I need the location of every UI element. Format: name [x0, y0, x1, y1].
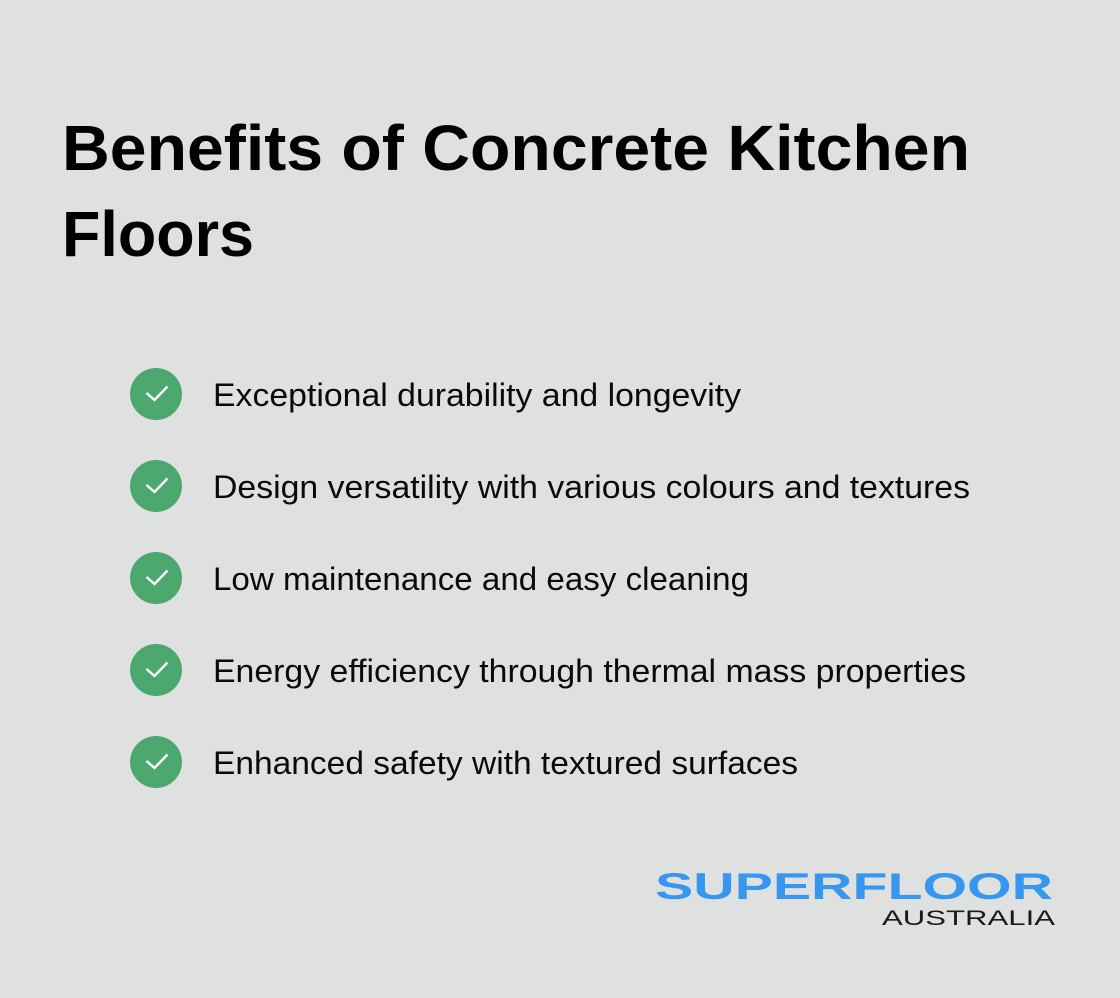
icon: check circle [130, 736, 182, 788]
icon: check circle [130, 460, 182, 512]
icon: check circle [130, 552, 182, 604]
benefit text: Low maintenance and easy cleaning [213, 561, 749, 597]
icon: check circle [130, 644, 182, 696]
benefit item 1 [130, 368, 742, 420]
benefit text: Enhanced safety with textured surfaces [213, 745, 798, 781]
title: Benefits of Concrete Kitchen [62, 112, 970, 184]
benefit text: Exceptional durability and longevity [213, 377, 742, 413]
title [62, 112, 970, 270]
benefit text: Design versatility with various colours and textures [213, 469, 970, 505]
logo: Superfloor Australia: SUPERFLOOR [655, 866, 1053, 907]
benefit item 3 [130, 552, 749, 604]
benefit item 2 [130, 460, 970, 512]
logo: Superfloor Australia: AUSTRALIA [882, 907, 1055, 930]
benefit text: Energy efficiency through thermal mass properties [213, 653, 966, 689]
benefit item 5 [130, 736, 798, 788]
benefits list [130, 368, 970, 788]
title: Floors [62, 198, 254, 270]
icon: check circle [130, 368, 182, 420]
benefit item 4 [130, 644, 966, 696]
logo: Superfloor Australia [655, 866, 1055, 930]
